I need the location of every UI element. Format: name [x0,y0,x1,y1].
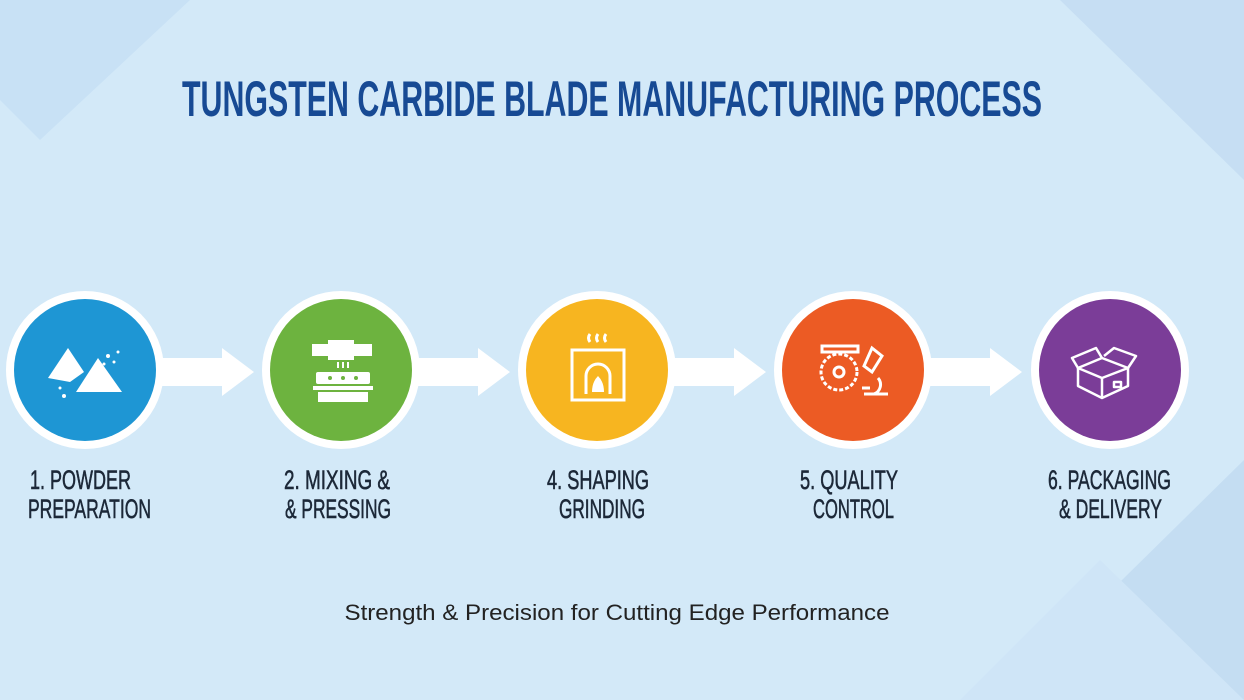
label 5: 6. PACKAGING [1048,465,1171,495]
label 3: GRINDING [559,494,645,524]
label 2: & PRESSING [285,494,391,524]
icon: press [312,340,373,402]
label 4 [800,465,898,524]
arrow 1 [160,348,254,396]
step 2 circle [262,291,420,449]
label 5: & DELIVERY [1059,494,1162,524]
icon: saw blade and microscope [821,346,888,394]
arrow 3 [672,348,766,396]
label 4: CONTROL [813,494,894,524]
label 5 [1048,465,1171,524]
label 1: PREPARATION [28,494,151,524]
label 1 [28,465,151,524]
arrow 2 [416,348,510,396]
label 4: 5. QUALITY [800,465,898,495]
step 1 circle [6,291,164,449]
step 4 circle [774,291,932,449]
label 3: 4. SHAPING [547,465,649,495]
label 2 [284,465,391,524]
label 1: 1. POWDER [30,465,131,495]
subtitle: Strength & Precision for Cutting Edge Performance [344,600,890,625]
icon: furnace [572,334,624,400]
icon: open box [1072,348,1136,398]
step 5 circle [1031,291,1189,449]
label 3 [547,465,649,524]
label 2: 2. MIXING & [284,465,390,495]
arrow 4 [928,348,1022,396]
icon: powder piles [48,348,122,398]
step 3 circle [518,291,676,449]
